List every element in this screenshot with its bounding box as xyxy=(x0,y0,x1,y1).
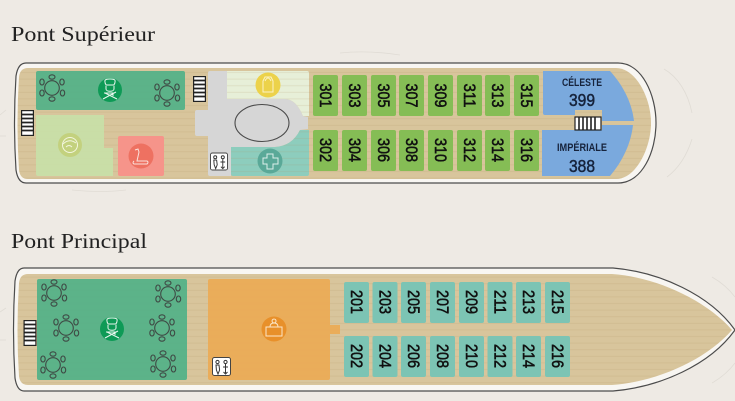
cabins: upper row: 313 xyxy=(488,84,506,108)
cabins: lower row: 310 xyxy=(431,138,449,162)
cabins: upper row: 215 xyxy=(548,290,566,314)
cabins: upper row: 203 xyxy=(376,290,394,314)
cabins: upper row: 303 xyxy=(345,84,363,108)
cabins: upper row: 201 xyxy=(347,290,365,314)
wake lines: upper deck xyxy=(0,52,692,192)
cabins: lower row xyxy=(313,130,539,171)
cabins: lower row: 208 xyxy=(433,344,451,368)
wake lines: lower deck xyxy=(0,277,735,383)
icon: chef xyxy=(100,317,124,341)
icon: stairs forward xyxy=(575,117,601,130)
suite: Impériale 388: IMPÉRIALE xyxy=(557,141,607,154)
title: Pont Principal: Pont Principal xyxy=(11,229,147,253)
icon: table 4 xyxy=(156,281,181,307)
suite: Céleste 399 xyxy=(543,71,634,121)
wood deck: upper xyxy=(18,68,651,179)
icon: treadmill xyxy=(128,144,154,168)
icon: table 6 xyxy=(151,351,176,377)
panel: gym xyxy=(118,136,164,176)
cabins: lower row: 212 xyxy=(490,344,508,368)
wood deck: lower xyxy=(18,274,732,385)
icon: table 3 xyxy=(41,352,66,378)
cabins: upper row: 209 xyxy=(462,290,480,314)
cabins: upper row: 309 xyxy=(431,84,449,108)
cabins: lower row: 210 xyxy=(462,344,480,368)
panel: restaurant xyxy=(37,279,187,380)
panel: lounge xyxy=(208,279,340,380)
suite: Céleste 399: 399 xyxy=(569,90,595,110)
cabins: upper row: 315 xyxy=(517,84,535,108)
cabins: lower row: 216 xyxy=(548,344,566,368)
cabins: lower row: 202 xyxy=(347,344,365,368)
cabins: lower row: 214 xyxy=(519,344,537,368)
cabins: lower row: 312 xyxy=(460,138,478,162)
suite: Céleste 399: CÉLESTE xyxy=(562,76,602,89)
planks: upper xyxy=(18,68,651,179)
cabins: upper row xyxy=(313,75,539,116)
hull: lower xyxy=(14,268,735,391)
panel: medical xyxy=(231,130,309,176)
cabins: upper row: 205 xyxy=(404,290,422,314)
title: Pont Supérieur: Pont Supérieur xyxy=(11,22,155,46)
panel: spa xyxy=(36,115,113,176)
icon: toilets lower xyxy=(212,358,230,376)
suite: Impériale 388 xyxy=(542,125,633,176)
hull: upper xyxy=(14,63,656,183)
cabins: upper row: 307 xyxy=(402,84,420,108)
cabins: lower row: 206 xyxy=(404,344,422,368)
cabins: lower row: 316 xyxy=(517,138,535,162)
icon: spa face xyxy=(58,133,82,157)
cabins: upper row: 301 xyxy=(316,84,334,108)
cabins: lower row: 314 xyxy=(488,138,506,162)
icon: shopping bag xyxy=(256,72,280,98)
deck: Pont Supérieur xyxy=(14,63,656,183)
cabins: lower row: 302 xyxy=(316,138,334,162)
cabins: lower row xyxy=(344,336,570,377)
icon: medical cross xyxy=(258,148,282,174)
panel: shop xyxy=(227,71,309,116)
icon: table right xyxy=(155,80,180,106)
suite: Impériale 388: 388 xyxy=(569,156,595,176)
icon: toilets upper xyxy=(210,153,228,170)
icon: table 1 xyxy=(42,280,67,306)
cabins: upper row: 305 xyxy=(374,84,392,108)
cabins: upper row: 207 xyxy=(433,290,451,314)
icon: table left xyxy=(40,75,65,101)
cabins: upper row: 211 xyxy=(490,290,508,314)
icon: table 5 xyxy=(150,315,175,341)
panel: central lobby xyxy=(195,71,308,176)
icon: table 2 xyxy=(54,315,79,341)
cabins: lower row: 304 xyxy=(345,138,363,162)
icon: stairs centre xyxy=(193,77,206,101)
icon: chef xyxy=(98,78,122,102)
icon: stairs left xyxy=(21,111,34,135)
icon: stairs xyxy=(24,321,36,345)
panel: restaurant xyxy=(36,71,185,110)
cabins: upper row xyxy=(344,282,570,323)
cabins: lower row: 306 xyxy=(374,138,392,162)
cabins: upper row: 213 xyxy=(519,290,537,314)
cabins: lower row: 308 xyxy=(402,138,420,162)
cabins: upper row: 311 xyxy=(460,84,478,108)
atrium oval xyxy=(235,104,289,142)
planks: lower xyxy=(18,274,732,385)
icon: reception xyxy=(262,316,286,342)
cabins: lower row: 204 xyxy=(376,344,394,368)
deck: Pont Principal xyxy=(14,268,735,391)
